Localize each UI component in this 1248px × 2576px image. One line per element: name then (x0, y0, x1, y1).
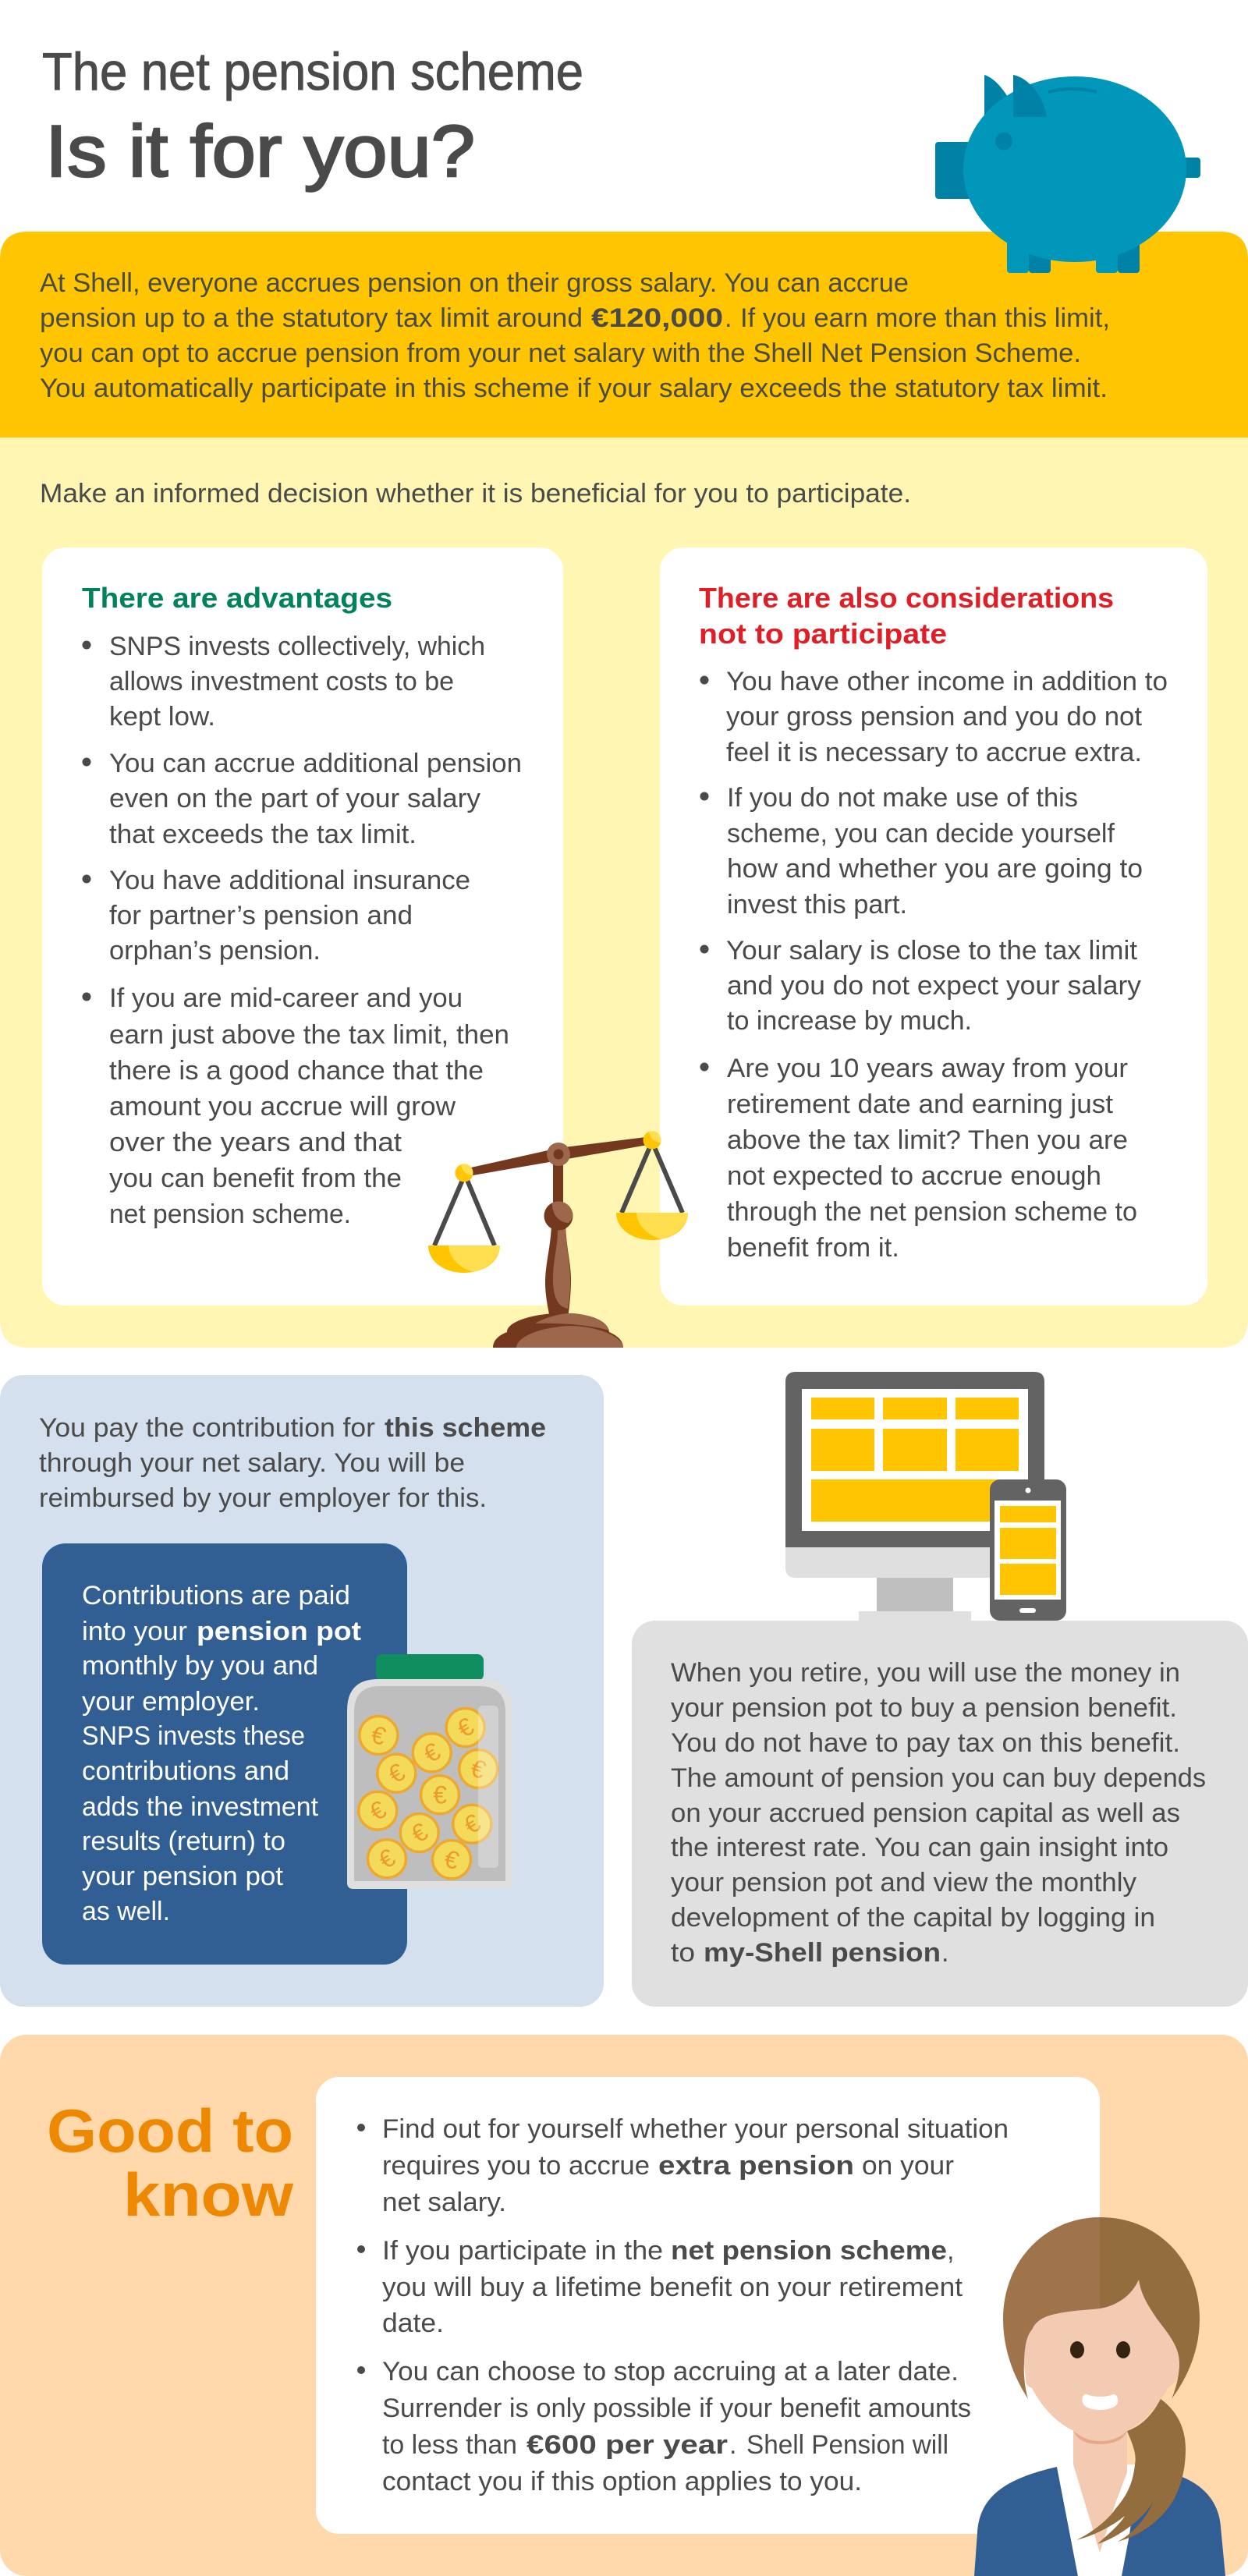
panel: intro band: you can opt to accrue pension from your net salary with the Shell Net Pension Scheme. (40, 338, 1081, 368)
list: advantages: You can accrue additional pension (109, 749, 522, 778)
list: considerations: not expected to accrue enough (727, 1161, 1101, 1191)
icon: coin jar: € (419, 1737, 445, 1768)
list: considerations: If you do not make use of this (727, 783, 1078, 813)
list: advantages: allows investment costs to be (109, 667, 454, 696)
panel: retirement: on your accrued pension capital as well as (671, 1798, 1180, 1828)
heading: advantages: There are advantages (82, 582, 392, 614)
icon: coin jar: € (459, 1809, 485, 1840)
heading: considerations (699, 582, 1114, 650)
list: advantages: even on the part of your salary (109, 784, 480, 813)
list: good to know (316, 2077, 1100, 2534)
panel: retirement: your pension pot to buy a pension benefit. (671, 1693, 1177, 1723)
text: contribution: through your net salary. You will be (39, 1448, 465, 1478)
list: good to know: If you participate in the (382, 2236, 663, 2266)
list: good to know: date. (382, 2308, 444, 2338)
panel: retirement: . (941, 1938, 948, 1968)
panel: intro band: €120,000 (591, 303, 723, 333)
icon: woman with ponytail (974, 2217, 1225, 2576)
panel: retirement: my-Shell pension (704, 1938, 941, 1968)
icon: coin jar: € (406, 1817, 433, 1848)
list: considerations: Your salary is close to the tax limit (726, 936, 1138, 966)
text: contribution: this scheme (385, 1413, 546, 1443)
callout: pension pot: SNPS invests these (82, 1721, 305, 1751)
icon: monitor and phone (785, 1372, 1066, 1621)
list: advantages: If you are mid-career and you (109, 983, 463, 1013)
panel: retirement: your pension pot and view the monthly (671, 1868, 1136, 1897)
callout: pension pot: Contributions are paid (82, 1581, 350, 1610)
list: good to know: net salary. (382, 2188, 506, 2217)
text: contribution: You pay the contribution for (39, 1413, 375, 1443)
list: good to know: Shell Pension will (746, 2430, 948, 2460)
title: The net pension scheme (42, 42, 583, 101)
list: good to know: net pension scheme (671, 2236, 947, 2266)
callout: pension pot: results (return) to (82, 1827, 285, 1856)
panel: decision background (0, 438, 1248, 1348)
list: considerations: to increase by much. (727, 1006, 972, 1036)
text: contribution (39, 1413, 546, 1513)
panel: considerations (660, 547, 1207, 1306)
list: considerations: your gross pension and you do not (726, 702, 1143, 732)
callout: pension pot: pension pot (197, 1617, 361, 1646)
list: considerations: through the net pension scheme to (727, 1197, 1137, 1227)
list: advantages: You have additional insurance (109, 866, 470, 895)
list: advantages: kept low. (109, 702, 215, 732)
text: informed decision: Make an informed decision whether it is beneficial for you to participate. (40, 479, 911, 508)
list: advantages: you can benefit from the (109, 1164, 402, 1193)
panel: retirement: development of the capital by logging in (671, 1903, 1155, 1933)
list: considerations: above the tax limit? Then you are (727, 1125, 1128, 1155)
list: considerations: Are you 10 years away from your (727, 1054, 1128, 1083)
panel: intro band: At Shell, everyone accrues pension on their gross salary. You can accrue (40, 268, 909, 298)
list: considerations: and you do not expect your salary (727, 971, 1141, 1001)
list: advantages: SNPS invests collectively, which (109, 632, 485, 661)
callout: pension pot: your pension pot (82, 1862, 284, 1891)
panel: good to know (0, 2035, 1248, 2576)
list: advantages: orphan’s pension. (109, 936, 321, 966)
heading: good to know: know (123, 2160, 293, 2229)
panel: intro band (0, 232, 1248, 438)
list: considerations: retirement date and earning just (727, 1090, 1114, 1119)
panel: retirement: You do not have to pay tax on this benefit. (671, 1728, 1180, 1758)
heading: good to know (47, 2096, 293, 2229)
panel: retirement: the interest rate. You can gain insight into (671, 1833, 1168, 1862)
list: good to know: Find out for yourself whether your personal situation (382, 2114, 1009, 2144)
icon: piggy bank (935, 75, 1200, 273)
panel: intro band: . (725, 303, 732, 333)
title: Is it for you? (45, 110, 475, 192)
text: contribution: reimbursed by your employer for this. (39, 1483, 487, 1513)
panel: intro band: You automatically participate in this scheme if your salary exceeds the statutory tax limit. (40, 374, 1108, 403)
heading: considerations: There are also considerations (699, 582, 1114, 614)
callout: pension pot: monthly by you and (82, 1651, 318, 1681)
panel: retirement: The amount of pension you can buy depends (671, 1763, 1206, 1793)
icon: coin jar: € (365, 1795, 391, 1827)
list: advantages: for partner’s pension and (109, 901, 413, 930)
icon: coin jar: € (452, 1712, 479, 1743)
list: advantages: earn just above the tax limit, then (109, 1020, 509, 1050)
list: good to know: extra pension (658, 2151, 854, 2181)
list: good to know: €600 per year (526, 2430, 728, 2460)
list: considerations (700, 667, 1168, 1263)
list: advantages: over the years and that (109, 1128, 402, 1157)
list: good to know: on your (862, 2151, 954, 2181)
icon: coin jar: € (441, 1844, 462, 1875)
panel: intro band: If you earn more than this limit, (740, 303, 1110, 333)
panel: retirement: When you retire, you will use the money in (671, 1658, 1180, 1688)
list: good to know: , (947, 2236, 954, 2266)
list: good to know: . (729, 2430, 736, 2460)
list: good to know: contact you if this option applies to you. (382, 2467, 862, 2496)
heading: good to know: Good to (47, 2096, 293, 2165)
callout: pension pot: contributions and (82, 1756, 289, 1786)
icon: balance scales (428, 1131, 688, 1348)
callout: pension pot: into your (82, 1617, 187, 1646)
panel: retirement: to (671, 1938, 695, 1968)
icon: coin jar: € (467, 1753, 490, 1784)
list: considerations: benefit from it. (727, 1233, 899, 1263)
icon: coin jar (347, 1654, 512, 1889)
heading: considerations: not to participate (699, 618, 947, 650)
list: good to know: You can choose to stop accruing at a later date. (382, 2357, 959, 2386)
list: considerations: You have other income in addition to (726, 667, 1168, 696)
list: good to know: Surrender is only possible if your benefit amounts (382, 2394, 971, 2423)
list: good to know: you will buy a lifetime benefit on your retirement (382, 2273, 963, 2302)
callout: pension pot (42, 1543, 407, 1965)
icon: coin jar: € (384, 1758, 410, 1789)
list: advantages: that exceeds the tax limit. (109, 820, 417, 849)
icon: coin jar: € (433, 1781, 447, 1809)
list: advantages: amount you accrue will grow (109, 1092, 456, 1121)
list: advantages: net pension scheme. (109, 1199, 351, 1229)
list: considerations: invest this part. (727, 890, 907, 919)
list: good to know: requires you to accrue (382, 2151, 650, 2181)
panel: intro band: pension up to a the statutory tax limit around (40, 303, 583, 333)
list: considerations: how and whether you are going to (727, 854, 1143, 884)
callout: pension pot: your employer. (82, 1687, 260, 1717)
list: considerations: feel it is necessary to accrue extra. (726, 738, 1142, 767)
title (42, 42, 583, 192)
icon: coin jar: € (368, 1720, 389, 1751)
panel: advantages (42, 547, 563, 1306)
callout: pension pot: adds the investment (82, 1792, 319, 1822)
panel: contribution (0, 1375, 604, 2007)
callout: pension pot: as well. (82, 1897, 170, 1926)
list: considerations: scheme, you can decide yourself (727, 819, 1115, 849)
panel: retirement (632, 1621, 1248, 2007)
list: advantages: there is a good chance that the (109, 1056, 484, 1086)
list: advantages (83, 632, 522, 1229)
list: good to know: to less than (382, 2430, 517, 2460)
icon: coin jar: € (374, 1843, 400, 1874)
